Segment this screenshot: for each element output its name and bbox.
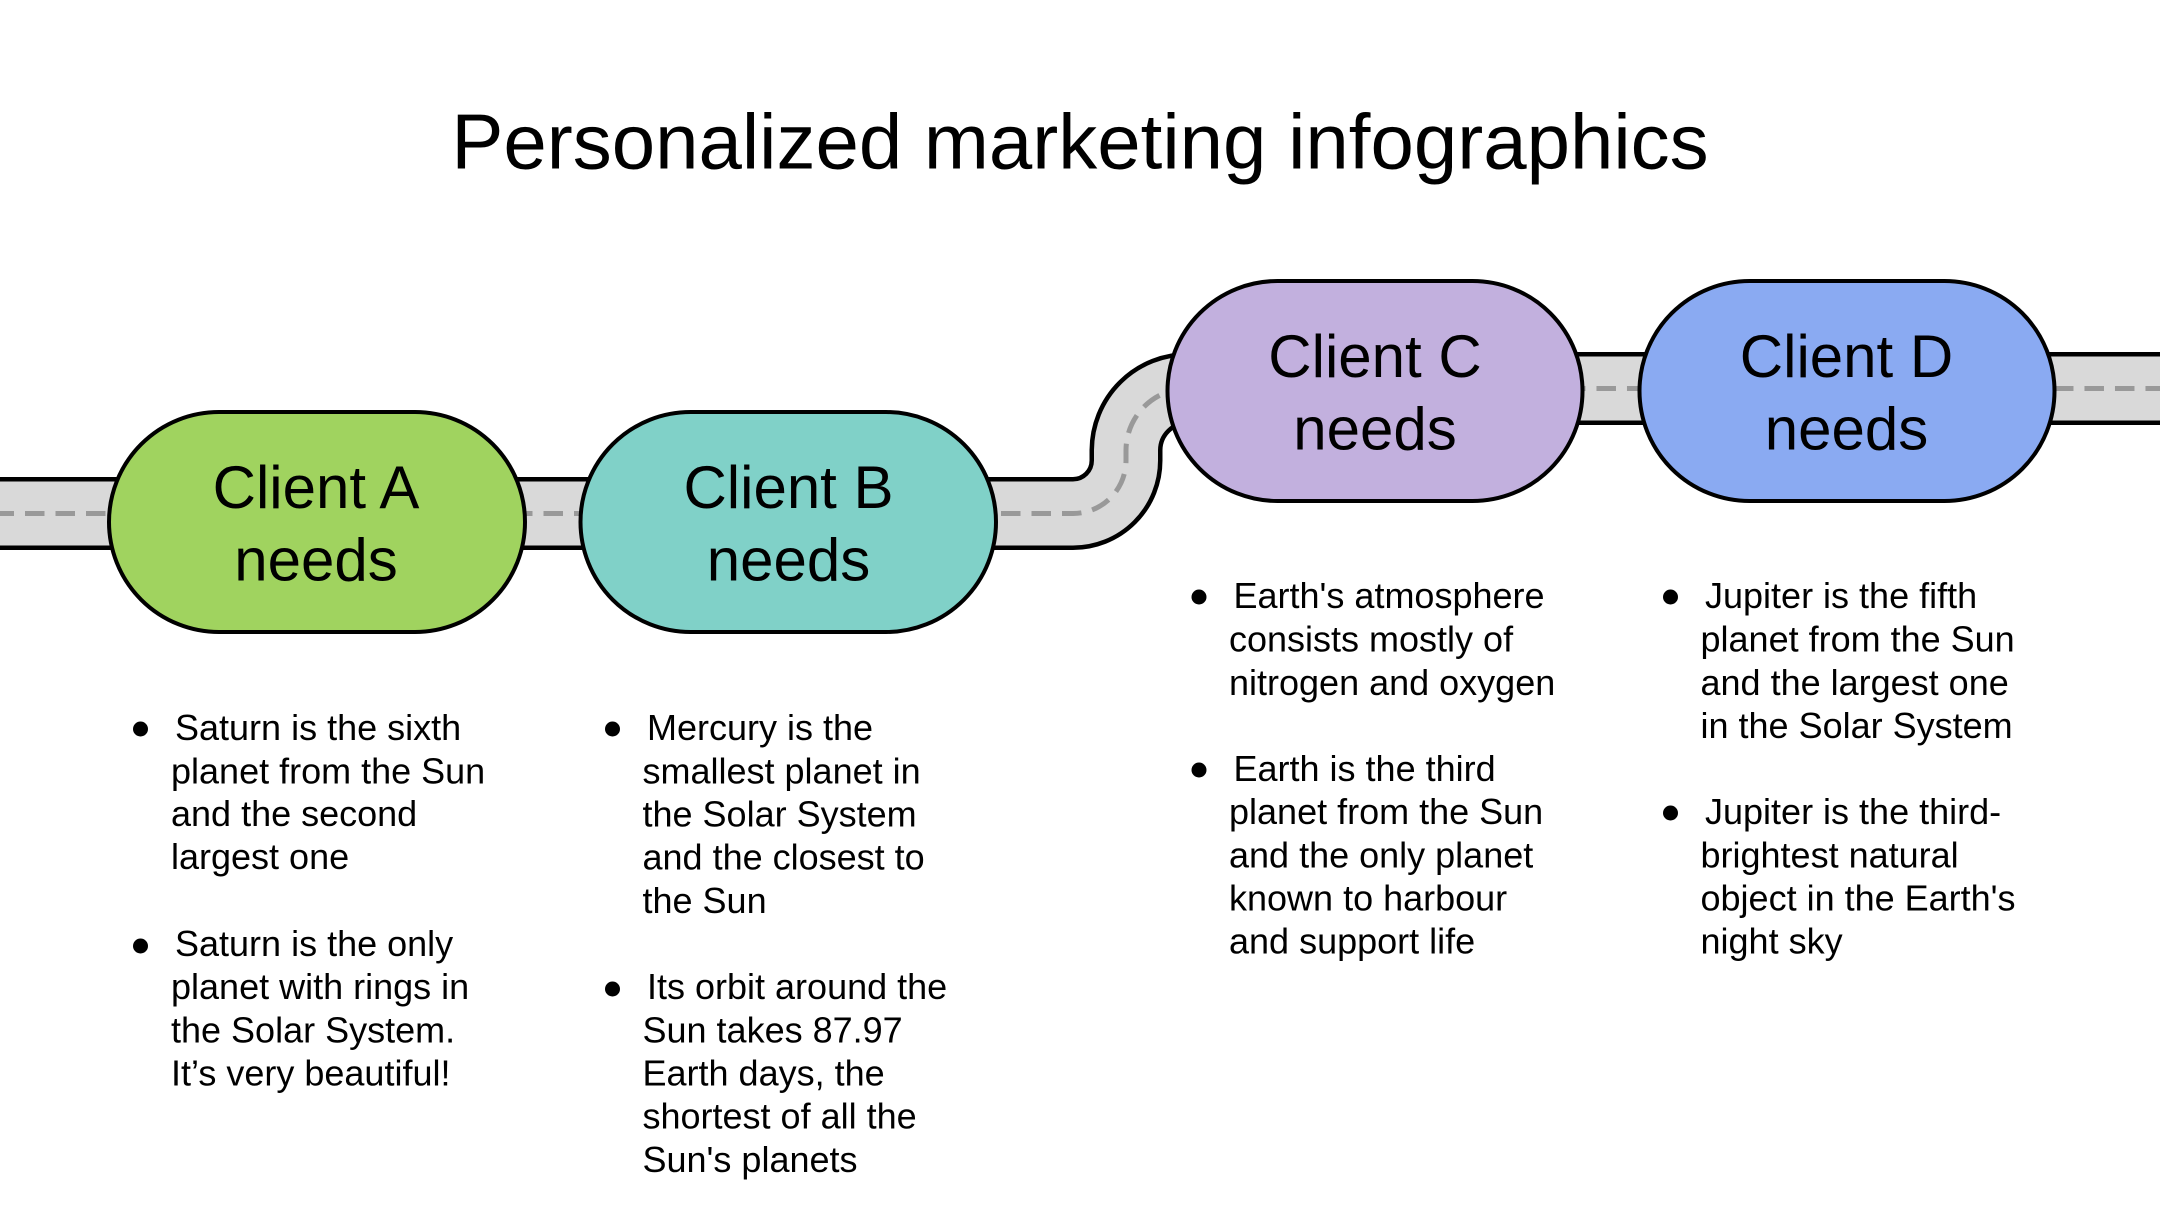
text block: Client D bullets: Jupiter is the fifth xyxy=(1705,575,1977,616)
text block: Client A bullets: Saturn is the sixth xyxy=(175,707,461,748)
text block: Client A bullets: and the second xyxy=(171,793,417,834)
text block: Client A bullets: It’s very beautiful! xyxy=(171,1052,450,1094)
road connecting the clients xyxy=(0,388,2160,514)
text block: Client C bullets xyxy=(1192,575,1555,962)
text block: Client B bullets: Mercury is the xyxy=(647,707,873,748)
panel: Client C xyxy=(1168,281,1582,962)
text block: Client D bullets: Jupiter is the third- xyxy=(1705,791,2001,832)
text block: Client B bullets: the Sun xyxy=(642,880,767,921)
text block: Client B bullets: Sun's planets xyxy=(642,1139,858,1180)
text block: Client B bullets: smallest planet in xyxy=(642,750,921,792)
pill: Client D xyxy=(1640,281,2054,501)
text block: Client C bullets: known to harbour xyxy=(1229,878,1507,918)
text block: Client B bullets: the Solar System xyxy=(642,794,917,834)
text block: Client B bullets xyxy=(605,707,947,1180)
text block: Client D bullets: night sky xyxy=(1700,920,1843,962)
text block: Client D bullets: planet from the Sun xyxy=(1700,618,2015,660)
heading: Client B needs: needs xyxy=(707,526,870,594)
heading: Client D needs: Client D xyxy=(1740,323,1953,390)
text block: Client B bullets: shortest of all the xyxy=(642,1096,917,1136)
pill: Client C xyxy=(1168,281,1582,501)
text block: Client A bullets: largest one xyxy=(171,836,349,877)
text block: Client A bullets xyxy=(133,707,485,1094)
text block: Client B bullets: Its orbit around the xyxy=(647,966,947,1007)
text block: Client C bullets: nitrogen and oxygen xyxy=(1229,662,1555,703)
text block: Client A bullets: the Solar System. xyxy=(171,1010,455,1050)
heading: Client A needs: Client A xyxy=(213,454,419,521)
text block: Client C bullets: consists mostly of xyxy=(1229,618,1514,660)
panel: Client B xyxy=(580,412,996,1180)
text block: Client D bullets: object in the Earth's xyxy=(1700,878,2016,918)
text block: Client C bullets: Earth is the third xyxy=(1234,748,1496,789)
text block: Client D bullets: in the Solar System xyxy=(1700,705,2013,746)
panel: Client D xyxy=(1640,281,2054,962)
text block: Client A bullets: planet with rings in xyxy=(171,966,469,1007)
text block: Client C bullets: and support life xyxy=(1229,920,1475,962)
pill: Client A xyxy=(109,412,525,632)
heading: Client D needs: needs xyxy=(1765,396,1928,462)
text block: Client B bullets: Sun takes 87.97 xyxy=(642,1010,903,1050)
panel: Client A xyxy=(109,412,525,1094)
text block: Client D bullets xyxy=(1663,575,2016,962)
heading: Client C needs: Client C xyxy=(1268,323,1482,390)
pill: Client B xyxy=(580,412,996,632)
text block: Client A bullets: Saturn is the only xyxy=(175,923,453,964)
title: Personalized marketing infographics xyxy=(451,98,1709,186)
heading: Client A needs: needs xyxy=(234,526,398,594)
text block: Client C bullets: Earth's atmosphere xyxy=(1234,575,1545,616)
heading: Client B needs: Client B xyxy=(683,454,894,521)
text block: Client C bullets: and the only planet xyxy=(1229,834,1533,876)
text block: Client B bullets: Earth days, the xyxy=(642,1052,885,1094)
text block: Client A bullets: planet from the Sun xyxy=(171,750,485,792)
text block: Client B bullets: and the closest to xyxy=(642,836,925,878)
heading: Client C needs: needs xyxy=(1293,396,1457,462)
text block: Client D bullets: and the largest one xyxy=(1700,662,2009,703)
text block: Client C bullets: planet from the Sun xyxy=(1229,791,1543,832)
text block: Client D bullets: brightest natural xyxy=(1700,834,1959,876)
